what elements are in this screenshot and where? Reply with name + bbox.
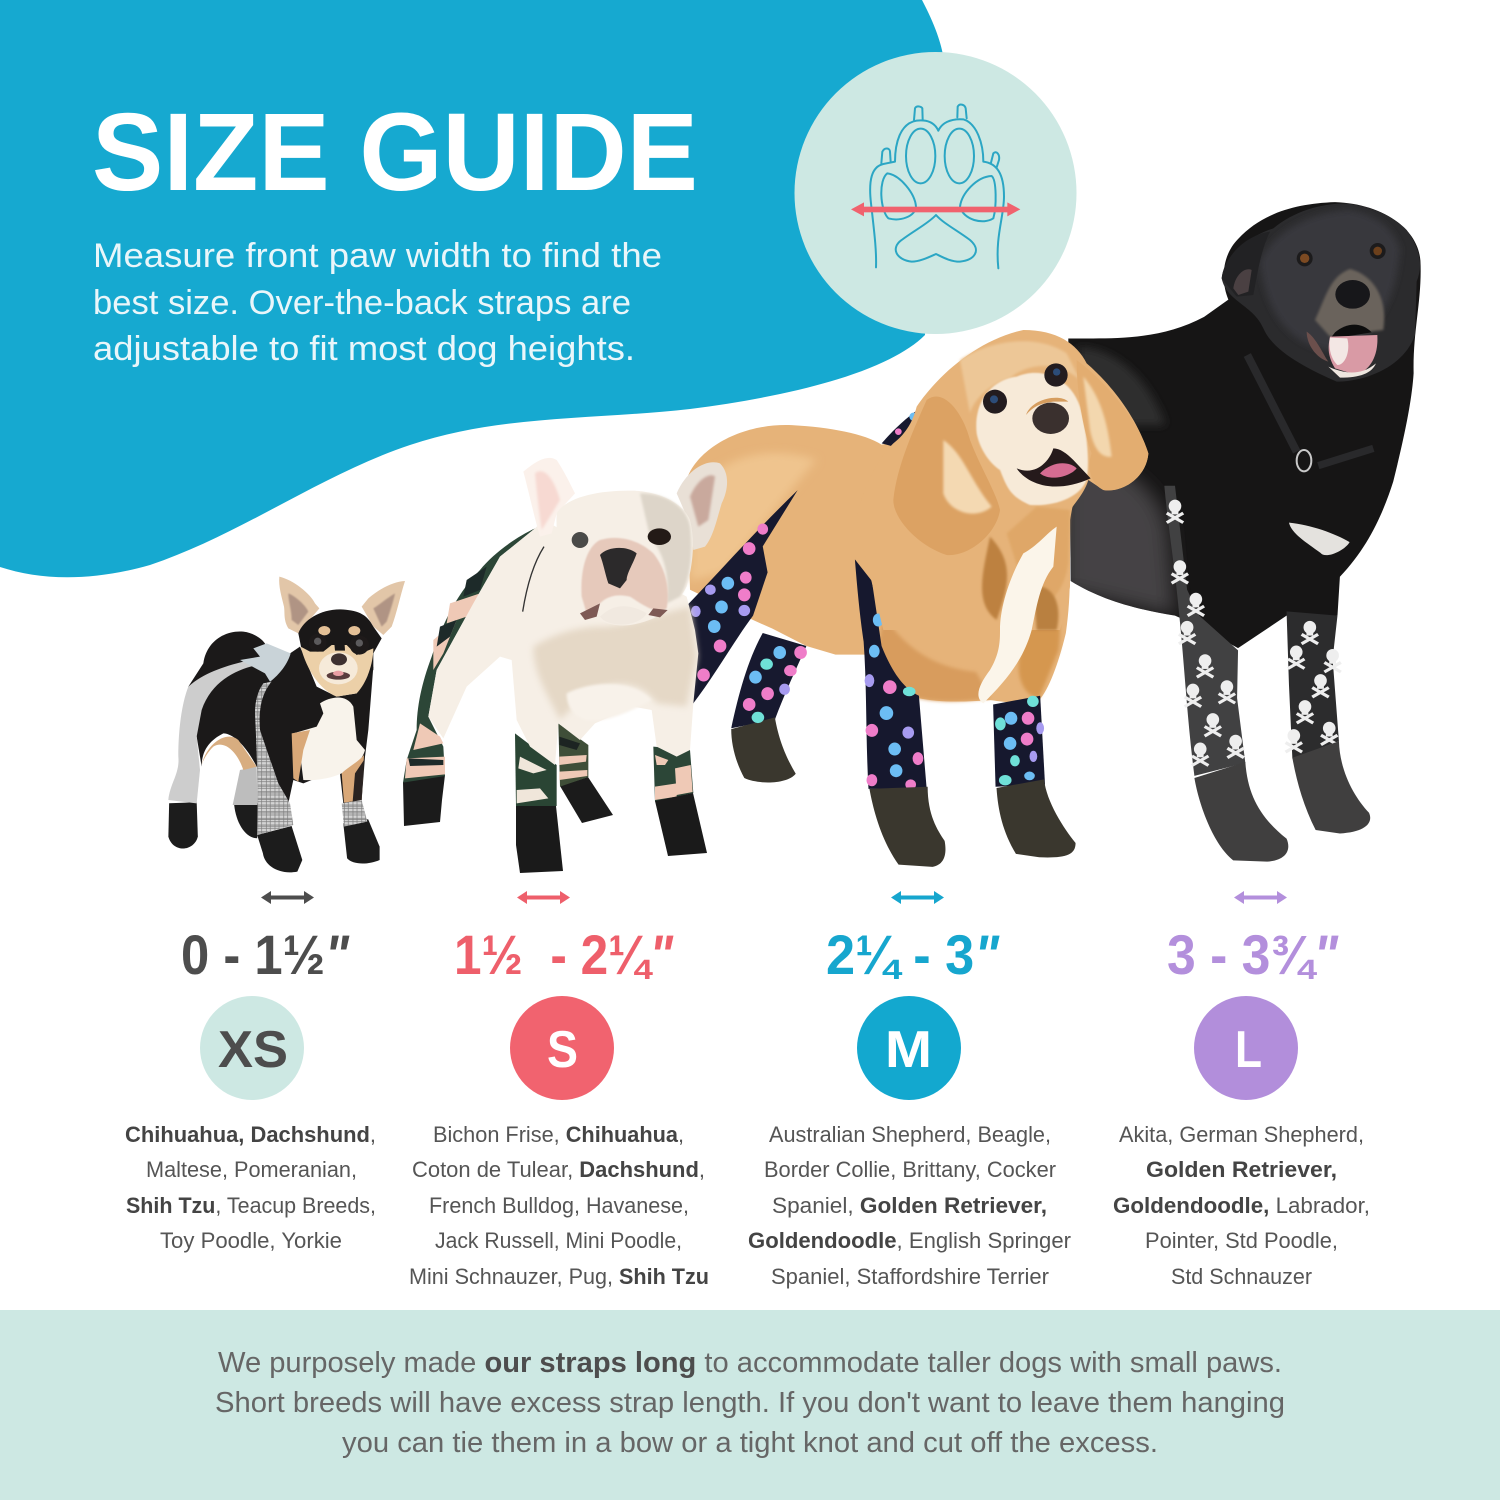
breed list: L: Std Schnauzer xyxy=(1171,1264,1312,1289)
breed list: XS: Shih Tzu, Teacup Breeds, xyxy=(126,1193,376,1218)
size column: L xyxy=(1113,891,1370,1289)
skull print leg sleeves xyxy=(1164,486,1341,776)
rubber boots xyxy=(1194,741,1370,862)
camo front sleeves xyxy=(515,723,693,806)
intro text block: best size. Over-the-back straps are xyxy=(93,284,631,322)
arrow: XS width xyxy=(261,891,314,904)
intro text block: adjustable to fit most dog heights. xyxy=(93,330,635,368)
rubber boots xyxy=(869,779,1076,867)
footer text: We purposely made our straps long to accommodate taller dogs with small paws. xyxy=(218,1347,1282,1379)
breed list: L: Pointer, Std Poodle, xyxy=(1145,1228,1338,1253)
range label: L: 3 - 3¾" xyxy=(1167,923,1339,986)
breed list: XS: Toy Poodle, Yorkie xyxy=(160,1228,342,1253)
size column: S xyxy=(409,891,709,1289)
size badge: S xyxy=(510,996,614,1100)
breed list: S: Coton de Tulear, Dachshund, xyxy=(412,1157,705,1182)
size badge: L: L xyxy=(1235,1021,1262,1079)
golden cocker spaniel xyxy=(688,330,1148,867)
breed list: S xyxy=(409,1122,709,1289)
title: SIZE GUIDE xyxy=(92,91,698,214)
breed list: L: Goldendoodle, Labrador, xyxy=(1113,1193,1370,1218)
breed list: S: Mini Schnauzer, Pug, Shih Tzu xyxy=(409,1264,709,1289)
breed list: S: Jack Russell, Mini Poodle, xyxy=(435,1228,682,1253)
breed list: M: Australian Shepherd, Beagle, xyxy=(769,1122,1051,1147)
rubber boots xyxy=(516,793,707,873)
footer text xyxy=(215,1347,1285,1459)
icon: paw measurement badge xyxy=(794,52,1076,334)
intro text block: Measure front paw width to find the xyxy=(93,237,662,275)
rubber boots xyxy=(168,802,380,872)
plaid strap and sleeves xyxy=(168,643,367,835)
footer text: Short breeds will have excess strap length. If you don't want to leave them hanging xyxy=(215,1387,1285,1419)
hind leg sleeve and boot xyxy=(731,633,806,782)
black dog head xyxy=(1222,203,1420,471)
large black dog xyxy=(1063,202,1421,862)
camo strap and sleeve xyxy=(403,528,535,783)
french bulldog xyxy=(403,458,727,873)
range label: XS: 0 - 1½" xyxy=(181,923,350,986)
size badge: XS xyxy=(200,996,304,1100)
ears xyxy=(279,577,405,635)
size badge: S: S xyxy=(547,1021,578,1079)
breed list: M: Spaniel, Golden Retriever, xyxy=(772,1193,1047,1218)
breed list: S: French Bulldog, Havanese, xyxy=(429,1193,689,1218)
size badge: M: M xyxy=(885,1021,932,1079)
header blue wave xyxy=(0,0,944,577)
footer note panel xyxy=(0,1310,1500,1500)
breed list: XS: Maltese, Pomeranian, xyxy=(146,1157,357,1182)
breed list: L: Akita, German Shepherd, xyxy=(1119,1122,1364,1147)
size column: M xyxy=(748,891,1071,1289)
collar and ring xyxy=(1247,355,1373,471)
breed list: M: Border Collie, Brittany, Cocker xyxy=(764,1157,1056,1182)
size badge: M xyxy=(857,996,961,1100)
breed list: S: Bichon Frise, Chihuahua, xyxy=(433,1122,684,1147)
breed list: M: Goldendoodle, English Springer xyxy=(748,1228,1071,1253)
intro text block xyxy=(93,237,662,368)
breed list: L: Golden Retriever, xyxy=(1146,1157,1337,1182)
chihuahua xyxy=(168,577,405,872)
breed list: M xyxy=(748,1122,1071,1289)
range label: S: 1½ - 2¼" xyxy=(454,923,674,986)
size badge: L xyxy=(1194,996,1298,1100)
breed list: XS xyxy=(125,1122,376,1253)
cocker spaniel head xyxy=(857,330,1148,703)
ears xyxy=(523,458,727,550)
footer text: you can tie them in a bow or a tight knot and cut off the excess. xyxy=(342,1427,1158,1459)
breed list: XS: Chihuahua, Dachshund, xyxy=(125,1122,376,1147)
breed list: M: Spaniel, Staffordshire Terrier xyxy=(771,1264,1049,1289)
breed list: L xyxy=(1113,1122,1370,1289)
arrow: M width xyxy=(891,891,944,904)
size column: XS xyxy=(125,891,376,1253)
size badge: XS: XS xyxy=(218,1021,288,1079)
polka dot sleeves and straps xyxy=(688,490,1045,790)
arrow: L width xyxy=(1234,891,1287,904)
range label: M: 2¼ - 3" xyxy=(826,923,1000,986)
arrow: S width xyxy=(517,891,570,904)
